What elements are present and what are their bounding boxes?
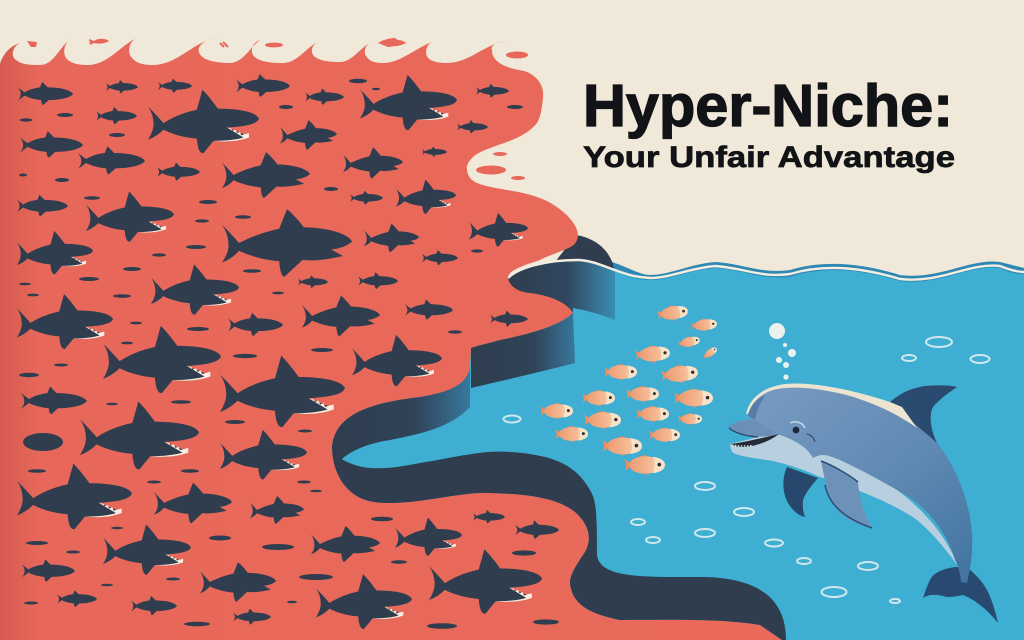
lower wall of the cut-out: right segment: [471, 313, 575, 388]
dolphin: [728, 383, 998, 623]
cheek crease: [807, 434, 815, 442]
upper wall of the cut-out: [508, 260, 615, 320]
large sharks with open mouths: [17, 75, 542, 629]
eye: [793, 427, 799, 433]
ring bubbles: [504, 337, 990, 603]
medium sharks with closed mouths: [154, 120, 419, 602]
small fish silhouettes: [17, 74, 559, 625]
lower wall of the cut-out: left segment: [332, 368, 470, 460]
blue sea panel: [340, 260, 1024, 640]
white air bubbles: [769, 323, 796, 380]
tail flukes: [923, 567, 998, 623]
mouth: [731, 434, 779, 447]
forehead shade: [748, 395, 766, 420]
dark winding band: [332, 447, 786, 640]
back flipper: [783, 467, 818, 517]
school of orange fish: [540, 304, 719, 476]
sharks and fish crowd: [17, 38, 559, 629]
cream back highlight: [746, 383, 917, 428]
front flipper: [821, 461, 872, 528]
eye brow: [790, 422, 805, 428]
dolphin body: [747, 384, 972, 583]
white water surface line: [508, 260, 1024, 280]
darker water band above the surface line: [612, 262, 1024, 282]
title: [583, 73, 955, 174]
snout: [728, 420, 778, 437]
small dark dashes: [19, 79, 559, 629]
dark mound behind red edge: [555, 235, 614, 268]
dolphin belly: [730, 432, 958, 566]
dark snout edge: [729, 428, 758, 437]
teeth line: [732, 445, 752, 446]
dorsal fin: [890, 385, 957, 443]
red ocean with waves: [0, 38, 782, 640]
heading: Hyper-Niche:: [583, 73, 953, 139]
flipper dark edge: [821, 461, 872, 528]
tiny red silhouettes in the wave crests: [27, 38, 528, 180]
subheading: Your Unfair Advantage: [583, 141, 955, 174]
